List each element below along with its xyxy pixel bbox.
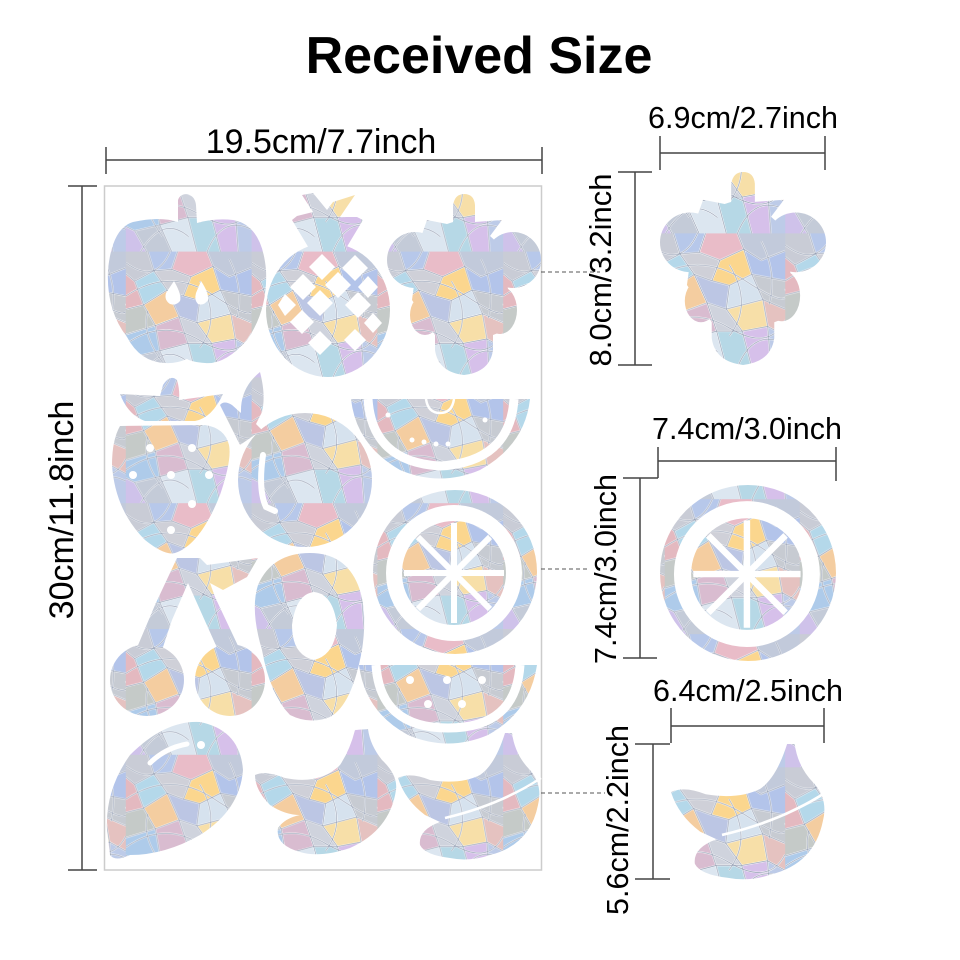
detail: trefoil height dimension: 8.0cm/3.2inch [583, 174, 618, 366]
detail: orange width dimension: 7.4cm/3.0inch [652, 412, 842, 446]
sticker: watermelon slice top [351, 399, 530, 478]
leader line: trefoil [541, 271, 600, 273]
sheet height dimension [43, 186, 97, 870]
sticker: watermelon slice bottom [359, 665, 537, 744]
title: Received Size [306, 27, 652, 85]
sticker: peach [220, 372, 372, 547]
sheet height dimension: 30cm/11.8inch [43, 401, 81, 619]
sticker: cherries [110, 558, 265, 716]
detail: orange height dimension: 7.4cm/3.0inch [589, 474, 623, 664]
detail: banana width dimension: 6.4cm/2.5inch [653, 674, 843, 708]
sticker: banana left [255, 729, 396, 854]
detail: enlarged trefoil sticker [660, 172, 826, 365]
sticker: strawberry [112, 378, 230, 553]
sticker: apple [108, 194, 266, 363]
sheet width dimension [106, 123, 542, 174]
detail: enlarged orange sticker [660, 485, 836, 661]
sticker: banana right [398, 733, 541, 859]
detail: orange width dimension [652, 412, 842, 481]
leader line: orange [541, 568, 590, 570]
detail: banana height dimension [601, 725, 670, 915]
leader line: banana [541, 792, 605, 794]
sticker: orange slice [373, 490, 537, 654]
detail: banana height dimension: 5.6cm/2.2inch [601, 725, 635, 915]
sticker: trefoil strawberry [387, 194, 541, 375]
detail: enlarged banana sticker [671, 744, 826, 879]
sheet width dimension: 19.5cm/7.7inch [206, 123, 436, 161]
detail: banana width dimension [653, 674, 843, 743]
detail: trefoil width dimension: 6.9cm/2.7inch [648, 101, 838, 135]
sticker: pineapple [266, 193, 390, 377]
sticker sheet panel [104, 186, 542, 870]
detail: trefoil width dimension [648, 101, 838, 170]
detail: orange height dimension [589, 474, 658, 664]
detail: trefoil height dimension [583, 172, 652, 366]
sticker: mango [107, 722, 243, 858]
sticker: pear ring [255, 553, 364, 721]
